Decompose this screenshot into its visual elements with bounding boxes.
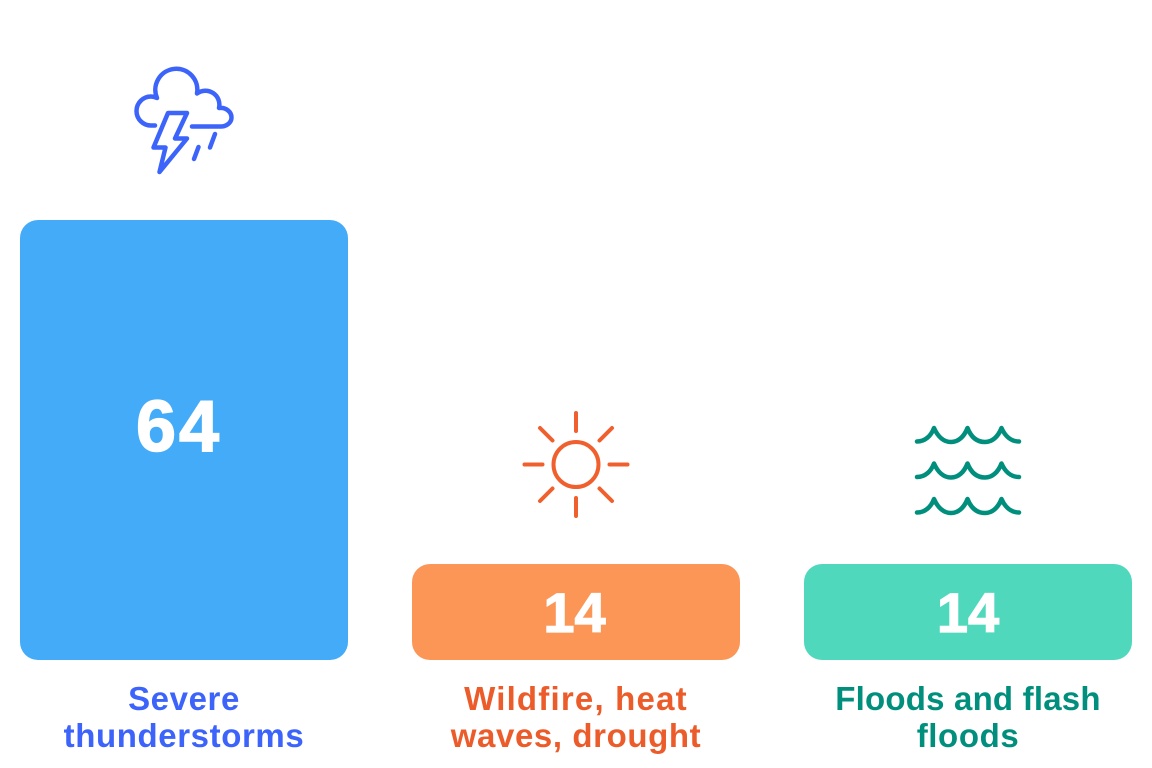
label: floods and flash floods xyxy=(835,680,1101,754)
label: wildfire, heat waves, drought xyxy=(450,680,701,754)
label: severe thunderstorms xyxy=(64,680,304,754)
label: wildfire, heat waves, drought: Wildfire, heat xyxy=(464,680,688,717)
label: floods and flash floods: floods xyxy=(917,717,1019,754)
label: severe thunderstorms: thunderstorms xyxy=(64,717,304,754)
icon: sun xyxy=(522,411,630,518)
icon: water waves xyxy=(914,426,1022,516)
bar: floods, value 14 xyxy=(804,564,1132,660)
icon: storm cloud with lightning and rain xyxy=(134,66,234,174)
bar: wildfire, value 14 xyxy=(412,564,740,660)
label: wildfire, heat waves, drought: waves, drought xyxy=(451,717,701,754)
label: severe thunderstorms: Severe xyxy=(128,680,240,717)
bar: wildfire, value 14: 14 xyxy=(543,580,606,644)
bar: severe thunderstorms, value 64 xyxy=(20,220,348,660)
label: floods and flash floods: Floods and flash xyxy=(835,680,1101,717)
bar: floods, value 14: 14 xyxy=(937,580,999,644)
bar: severe thunderstorms, value 64: 64 xyxy=(136,386,222,466)
